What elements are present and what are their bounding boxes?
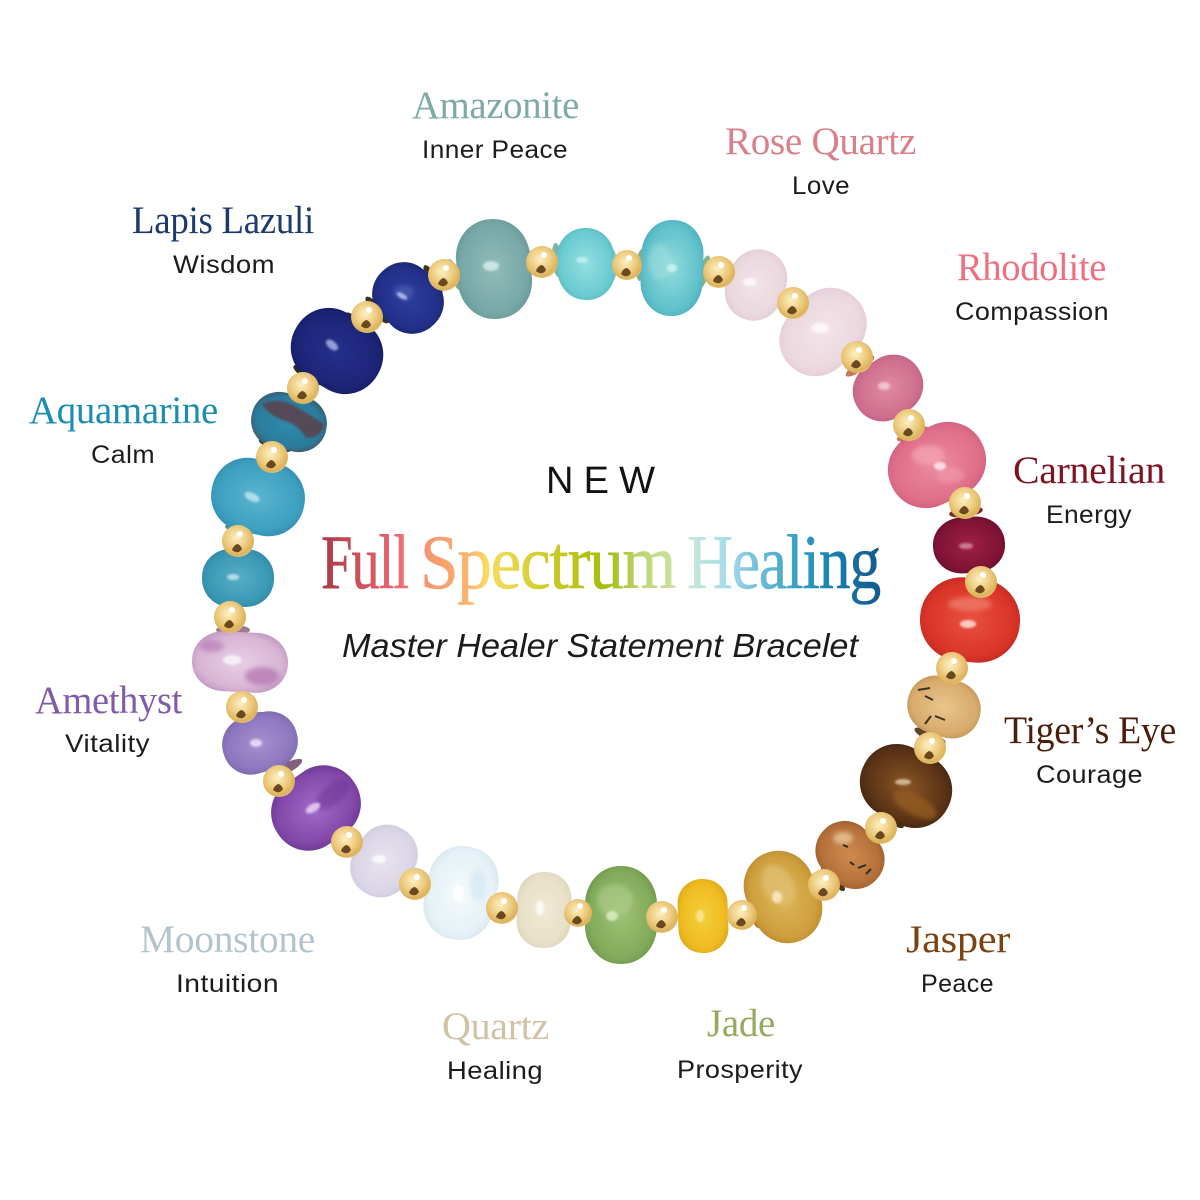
subtitle: Master Healer Statement Bracelet (342, 627, 860, 664)
label: Amethyst (35, 679, 182, 758)
label: Jasper: Peace (921, 970, 994, 998)
label: Carnelian: Carnelian (1013, 449, 1165, 492)
title: Full Spectrum Healing: Full (321, 519, 408, 605)
bead: carnelian large (917, 574, 1023, 666)
bead: lapis lazuli small (360, 250, 456, 346)
bead: aquamarine large (204, 451, 312, 543)
gold spacer beads (214, 246, 997, 933)
bead: aquamarine small (202, 549, 274, 607)
label: Jasper (906, 918, 1010, 998)
label: Quartz: Healing (447, 1057, 543, 1085)
label: Lapis Lazuli: Lapis Lazuli (132, 199, 314, 242)
bead: amethyst lavender (215, 705, 305, 781)
bead: jade (585, 866, 657, 964)
bead: opal quartz (417, 840, 505, 946)
bead: lapis lazuli large (277, 295, 397, 407)
title: Full Spectrum Healing: Spectrum (420, 519, 676, 605)
label: Quartz: Quartz (442, 1005, 549, 1048)
label: Amethyst: Vitality (65, 730, 150, 758)
label: Amazonite: Amazonite (412, 84, 579, 127)
label: Carnelian: Energy (1046, 501, 1132, 529)
label: Aquamarine (29, 389, 218, 469)
bead: quartz cream (516, 871, 572, 949)
label: Rhodolite (955, 246, 1109, 326)
label: Aquamarine: Calm (91, 441, 155, 469)
label: Jade: Prosperity (677, 1056, 803, 1084)
title: Full Spectrum Healing: Healing (687, 519, 881, 605)
bead: amethyst pale (190, 630, 290, 694)
heading: NEW: NEW (546, 460, 655, 502)
label: Carnelian (1013, 449, 1165, 529)
bead: yellow jade (677, 878, 729, 954)
label: Lapis Lazuli (132, 199, 314, 279)
label: Aquamarine: Aquamarine (29, 389, 218, 432)
bead: rhodolite small (841, 343, 935, 433)
bead: amber jasper (733, 840, 833, 954)
spacer discs (216, 242, 984, 935)
label: Jade (677, 1002, 803, 1084)
bead: rose quartz small (716, 241, 796, 329)
label: Amazonite (412, 84, 579, 164)
label: Moonstone: Moonstone (140, 918, 315, 961)
label: Amethyst: Amethyst (35, 679, 182, 722)
bead: amazonite medium (639, 219, 705, 317)
label: Tiger's Eye: Tiger’s Eye (1004, 709, 1176, 752)
label: Lapis Lazuli: Wisdom (173, 251, 275, 279)
label: Moonstone: Intuition (176, 970, 279, 998)
label: Amazonite: Inner Peace (422, 136, 568, 164)
bead: rhodolite large (876, 409, 998, 521)
label: Rose Quartz (725, 120, 916, 200)
label: Rhodolite: Compassion (955, 298, 1109, 326)
label: Moonstone (140, 918, 315, 998)
title: Full Spectrum Healing (321, 519, 881, 605)
label: Rose Quartz: Love (792, 172, 850, 200)
label: Rose Quartz: Rose Quartz (725, 120, 916, 163)
bead: amethyst dark (257, 751, 375, 865)
label: Tiger's Eye: Courage (1036, 761, 1143, 789)
bead: moonstone (340, 814, 428, 908)
bead: carnelian small (931, 515, 1007, 575)
bead: amazonite small (555, 226, 617, 302)
label: Rhodolite: Rhodolite (957, 246, 1106, 289)
bead: tiger's eye (847, 731, 965, 841)
bead: jasper (804, 809, 896, 901)
bead: rose quartz large (765, 273, 881, 391)
label: Jade: Jade (707, 1002, 775, 1045)
bead: tiger's eye tan (900, 668, 988, 746)
bead: chrysocolla (246, 387, 332, 457)
label: Tiger's Eye (1004, 709, 1176, 789)
bracelet (190, 216, 1023, 964)
label: Jasper: Jasper (906, 918, 1010, 961)
bead: amazonite large (453, 216, 535, 322)
label: Quartz (442, 1005, 549, 1085)
